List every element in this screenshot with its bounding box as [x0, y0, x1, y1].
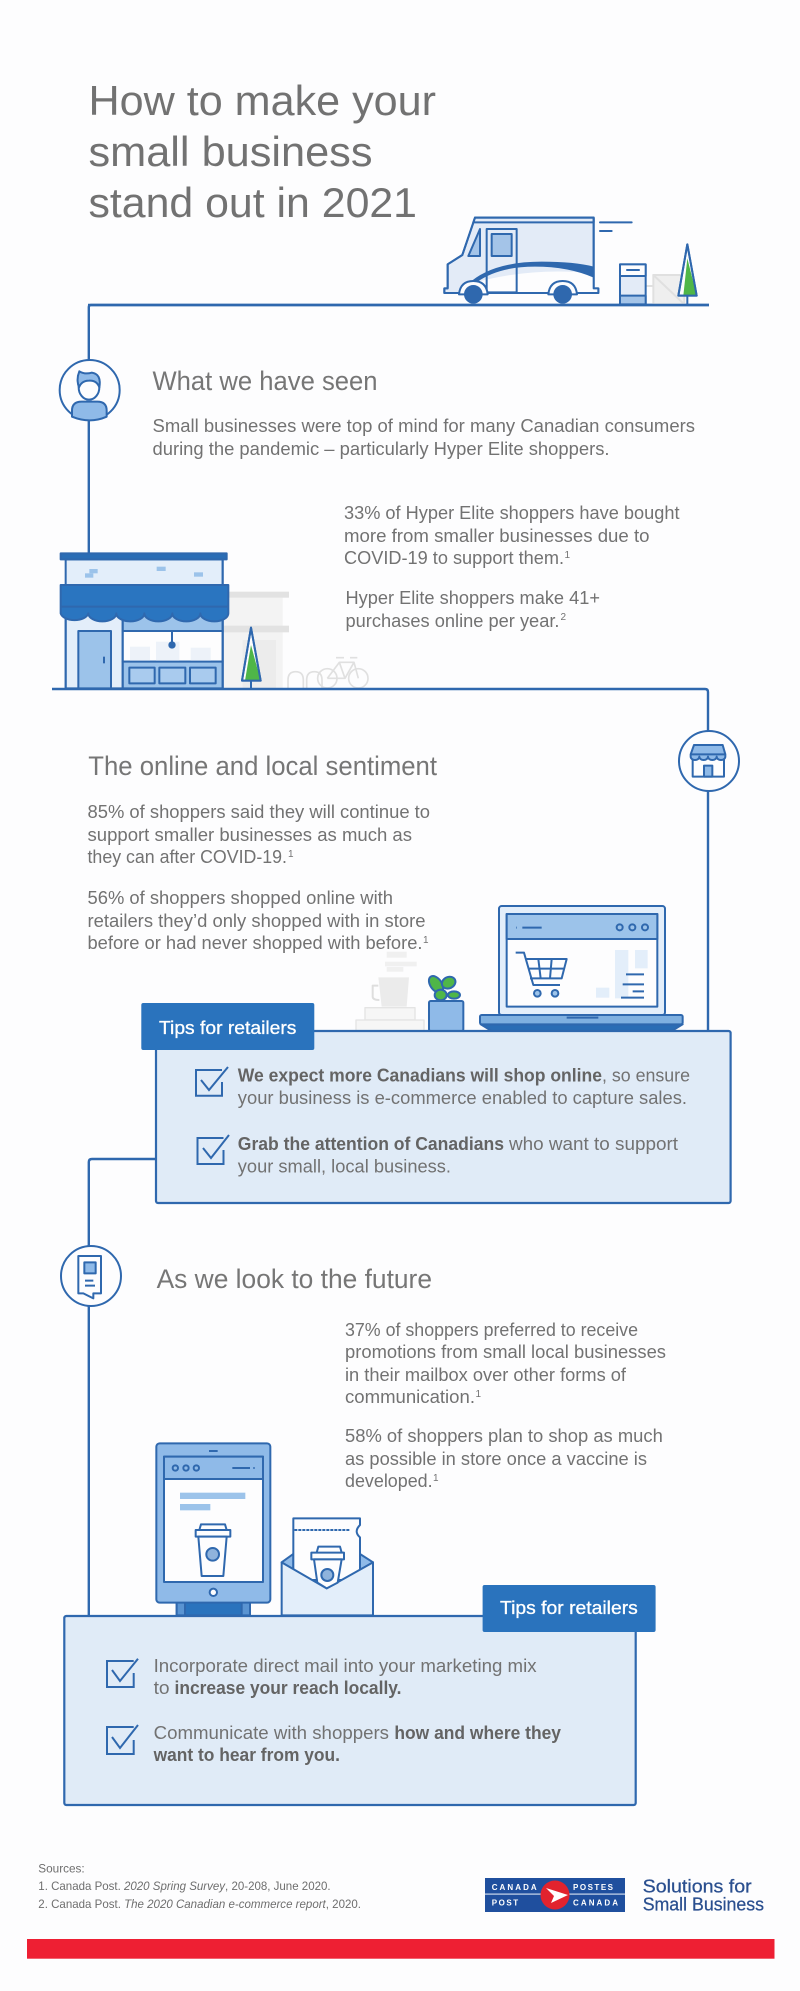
text block: hyper elite stat 41+: 2 [560, 612, 566, 623]
text block: 37% stat: 37% of shoppers preferred to receive [345, 1320, 638, 1340]
title [88, 77, 436, 226]
text block: 56% stat: before or had never shopped with before. [88, 933, 422, 953]
logo: canada post [485, 1878, 625, 1912]
text block: 37% stat: in their mailbox over other forms of [345, 1365, 627, 1385]
panel: tips for retailers 1 [141, 1003, 731, 1203]
text: tip 1 [238, 1066, 690, 1108]
text block: 58% stat [345, 1426, 663, 1491]
timeline path: middle section [52, 689, 708, 1031]
tab: tips for retailers 1: Tips for retailers [159, 1018, 296, 1038]
text block: 85% stat: 1 [288, 849, 294, 860]
text block: sources: 1. Canada Post. 2020 Spring Survey, 20-208, June 2020. [38, 1879, 331, 1893]
text block: sources: Sources: [38, 1862, 85, 1876]
icon: document in circle [61, 1246, 121, 1306]
text block: hyper elite stat 41+: Hyper Elite shoppers make 41+ [346, 588, 600, 608]
heading: online and local sentiment: The online and local sentiment [88, 751, 437, 781]
logo: canada post: CANADA [492, 1883, 537, 1892]
text block: hyper elite stat 33% [344, 503, 680, 568]
title: How to make your [88, 77, 436, 124]
text: solutions for small business: Solutions for [643, 1877, 752, 1897]
panel: tips for retailers 2 [64, 1585, 656, 1805]
text: tip 1: your business is e-commerce enabled to capture sales. [238, 1088, 687, 1108]
text block: hyper elite stat 33%: 1 [564, 550, 570, 561]
logo: canada post: CANADA [573, 1899, 618, 1908]
ground line: top section [88, 304, 709, 306]
tab: tips for retailers 2 [483, 1585, 656, 1632]
text block: hyper elite stat 33%: more from smaller businesses due to [344, 526, 650, 546]
icon: checkbox 1 [196, 1067, 228, 1096]
text: tip 3: Incorporate direct mail into your marketing mix [154, 1656, 537, 1676]
text block: 58% stat: 58% of shoppers plan to shop as much [345, 1426, 663, 1446]
text block: 58% stat: as possible in store once a vaccine is [345, 1449, 647, 1469]
text block: 56% stat [88, 888, 429, 953]
text block: 37% stat: promotions from small local businesses [345, 1342, 666, 1362]
icon: checkbox 2 [198, 1135, 229, 1164]
text block: 85% stat: they can after COVID-19. [88, 847, 287, 867]
text block: hyper elite stat 41+: purchases online per year. [346, 611, 560, 631]
timeline path: lower section [89, 1159, 156, 1616]
text block: 56% stat: 56% of shoppers shopped online with [88, 888, 393, 908]
text block: 37% stat: communication. [345, 1387, 475, 1407]
illustration: coffee cup on books, plant and laptop with shopping cart [356, 906, 683, 1031]
text block: hyper elite stat 33%: 33% of Hyper Elite shoppers have bought [344, 503, 680, 523]
illustration: delivery truck with mailbox and tree [444, 218, 697, 304]
text: solutions for small business [643, 1877, 764, 1915]
heading: as we look to the future: As we look to the future [157, 1264, 432, 1294]
text: tip 4: how and where they [394, 1723, 561, 1743]
text block: 37% stat: 1 [476, 1389, 482, 1400]
text block: 58% stat: 1 [433, 1473, 439, 1484]
text block: intro: Small businesses were top of mind for many Canadian consumers [152, 416, 695, 436]
title: small business [88, 128, 372, 175]
text block: 85% stat [88, 802, 430, 867]
text: tip 3: to [154, 1678, 170, 1698]
title: stand out in 2021 [88, 179, 417, 226]
footer red bar [27, 1939, 774, 1959]
text block: intro [152, 416, 695, 459]
illustration: tablet and envelope with coffee coupons [156, 1443, 373, 1615]
text block: 56% stat: 1 [423, 935, 429, 946]
text: tip 1: We expect more Canadians will shop online [238, 1066, 602, 1086]
text block: 85% stat: 85% of shoppers said they will continue to [88, 802, 430, 822]
text block: 58% stat: developed. [345, 1471, 433, 1491]
logo: canada post: POSTES [573, 1883, 614, 1892]
text block: sources: 2. Canada Post. The 2020 Canadian e-commerce report, 2020. [38, 1897, 361, 1911]
text: tip 4: want to hear from you. [153, 1745, 340, 1765]
timeline path: top section [89, 305, 709, 553]
text block: sources [38, 1862, 361, 1911]
tab: tips for retailers 2: Tips for retailers [500, 1598, 638, 1618]
tab: tips for retailers 1 [141, 1003, 314, 1050]
text: tip 2: your small, local business. [238, 1157, 451, 1177]
illustration: storefront with tree and bicycle [61, 553, 368, 688]
text: tip 2 [238, 1134, 678, 1177]
icon: store in circle [679, 731, 739, 791]
text: tip 2: who want to support [508, 1134, 678, 1154]
icon: checkbox 4 [107, 1725, 138, 1754]
icon: person in circle [60, 360, 120, 420]
text block: hyper elite stat 41+ [346, 588, 600, 631]
text block: 37% stat [345, 1320, 666, 1407]
text: tip 3: increase your reach locally. [174, 1678, 402, 1698]
text: tip 1: , so ensure [602, 1066, 690, 1086]
text: tip 2: Grab the attention of Canadians [238, 1134, 504, 1154]
heading: what we have seen: What we have seen [152, 366, 378, 396]
text block: 56% stat: retailers they’d only shopped with in store [88, 911, 426, 931]
text block: intro: during the pandemic – particularly Hyper Elite shoppers. [152, 439, 610, 459]
text block: hyper elite stat 33%: COVID-19 to support them. [344, 548, 564, 568]
text: tip 3 [154, 1656, 537, 1698]
text: solutions for small business: Small Business [643, 1895, 764, 1915]
text block: 85% stat: support smaller businesses as much as [88, 825, 412, 845]
text: tip 4: Communicate with shoppers [154, 1723, 389, 1743]
icon: checkbox 3 [107, 1659, 138, 1687]
text: tip 4 [153, 1723, 561, 1765]
logo: canada post: POST [492, 1899, 518, 1908]
